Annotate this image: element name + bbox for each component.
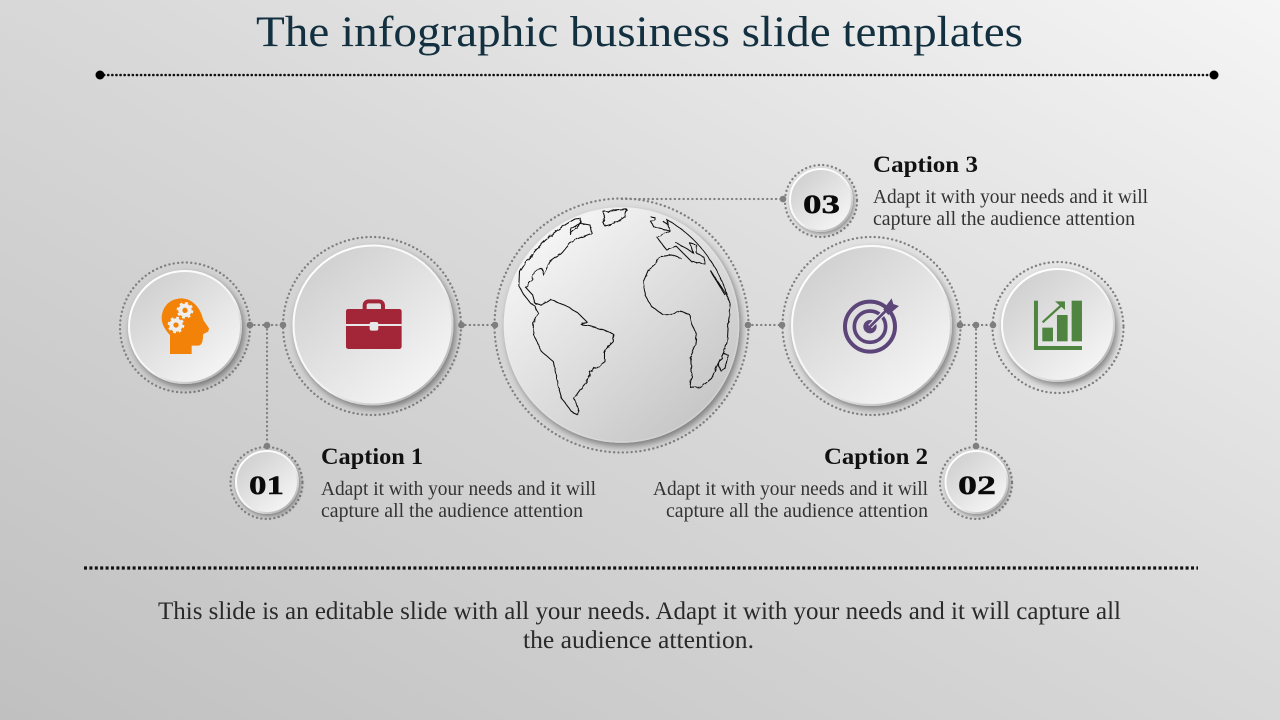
icon: head with gears bbox=[162, 298, 209, 354]
footer text: the audience attention. bbox=[523, 627, 754, 654]
caption 1: Adapt it with your needs and it will bbox=[321, 479, 597, 500]
caption 2: Adapt it with your needs and it will bbox=[653, 479, 929, 500]
icon: target with arrow bbox=[845, 298, 899, 352]
caption 3 bbox=[873, 152, 1149, 230]
panel: head icon circle bbox=[120, 262, 250, 392]
badge 03: 03 bbox=[803, 190, 840, 219]
continents outline bbox=[519, 209, 731, 416]
icon: briefcase bbox=[346, 301, 402, 349]
top divider with end dots bbox=[96, 70, 1218, 80]
badge 01 bbox=[230, 447, 302, 519]
caption 2 bbox=[653, 444, 929, 522]
caption 2: capture all the audience attention bbox=[666, 501, 928, 522]
badge 03 bbox=[785, 165, 857, 237]
icon: growth chart bbox=[1034, 301, 1082, 350]
caption 3: capture all the audience attention bbox=[873, 209, 1135, 230]
badge 02 bbox=[940, 447, 1012, 519]
badge 02: 02 bbox=[958, 471, 996, 500]
caption 1: capture all the audience attention bbox=[321, 501, 583, 522]
caption 3: Caption 3 bbox=[873, 152, 978, 177]
badge 01: 01 bbox=[249, 471, 284, 500]
caption 1 bbox=[321, 444, 597, 522]
panel: briefcase circle bbox=[283, 237, 461, 415]
caption 3: Adapt it with your needs and it will bbox=[873, 187, 1149, 208]
panel: chart circle bbox=[992, 262, 1124, 393]
connector lines bbox=[247, 196, 996, 449]
footer text bbox=[158, 598, 1121, 654]
panel: target circle bbox=[782, 237, 960, 415]
caption 2: Caption 2 bbox=[824, 444, 928, 469]
panel: globe bbox=[494, 198, 748, 452]
footer text: This slide is an editable slide with all your needs. Adapt it with your needs and it will capture all bbox=[158, 598, 1121, 625]
caption 1: Caption 1 bbox=[321, 444, 423, 469]
title: The infographic business slide templates bbox=[256, 9, 1023, 56]
